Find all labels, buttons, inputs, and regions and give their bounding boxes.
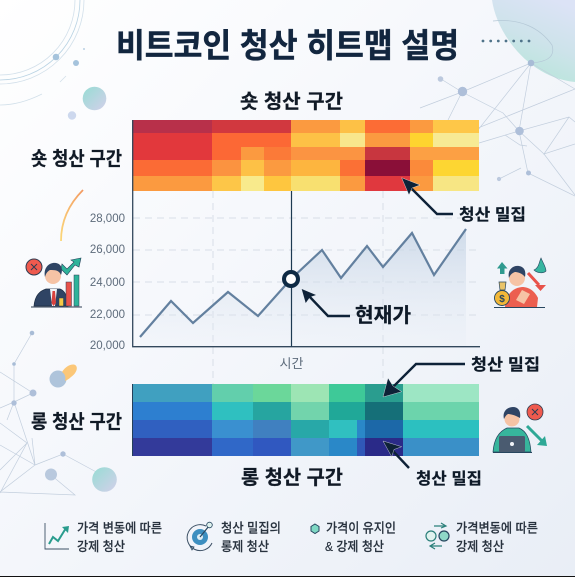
callout: long cluster lower bbox=[383, 441, 482, 488]
decoration: bubbles top left bbox=[68, 87, 106, 120]
legend item 3 bbox=[311, 520, 396, 554]
long liquidation heatmap bbox=[132, 384, 479, 456]
label: short zone left: 숏 청산 구간 bbox=[31, 148, 122, 170]
price area fill bbox=[140, 229, 466, 346]
icon: businessman with chart bbox=[26, 258, 82, 307]
legend item 4: 가격변동에 따른 bbox=[456, 520, 538, 536]
price line bbox=[140, 229, 466, 337]
legend item 4: 강제 청산 bbox=[456, 539, 504, 554]
legend item 1: 강제 청산 bbox=[77, 539, 125, 554]
legend item 4 bbox=[426, 520, 538, 554]
y axis labels: 28,000 bbox=[90, 213, 125, 225]
x axis label: 시간 bbox=[280, 356, 303, 371]
legend item 2: 청산 밀집의 bbox=[221, 520, 281, 536]
y axis labels: 22,000 bbox=[90, 309, 125, 321]
legend item 1 bbox=[45, 520, 162, 554]
legend item 2: 롱제 청산 bbox=[221, 539, 269, 554]
icon: trader with bitcoin bag bbox=[494, 258, 546, 308]
decoration: orange arc bbox=[61, 190, 83, 241]
callout: top cluster bbox=[402, 178, 526, 224]
callout: current price: 현재가 bbox=[355, 304, 411, 327]
icon: trader with bitcoin bag: $ bbox=[499, 294, 505, 305]
decoration: bubble bottom left bbox=[92, 467, 117, 492]
callout: long cluster upper: 청산 밀집 bbox=[471, 356, 540, 374]
legend item 1: 가격 변동에 따른 bbox=[77, 520, 162, 536]
decoration: network right bbox=[420, 60, 575, 196]
heading: short zone top: 숏 청산 구간 bbox=[240, 91, 343, 113]
current price marker bbox=[284, 272, 298, 286]
legend item 3: 가격이 유지인 bbox=[326, 520, 396, 536]
title: 비트코인 청산 히트맵 설명 bbox=[116, 27, 459, 64]
decoration: network bottom left bbox=[0, 331, 100, 495]
callout: long cluster upper bbox=[383, 356, 540, 397]
decoration: top left rings bbox=[0, 0, 85, 105]
legend item 2 bbox=[187, 520, 281, 554]
legend item 3: & 강제 청산 bbox=[325, 539, 384, 554]
heading: long zone bottom: 롱 청산 구간 bbox=[241, 467, 343, 489]
callout: long cluster lower: 청산 밀집 bbox=[416, 470, 482, 488]
y axis labels: 20,000 bbox=[90, 340, 125, 352]
y axis labels: 24,000 bbox=[90, 277, 125, 289]
callout: current price bbox=[302, 289, 411, 327]
short liquidation heatmap bbox=[132, 120, 479, 191]
current time line bbox=[290, 191, 292, 346]
price chart bbox=[133, 120, 480, 384]
decoration: capsule bbox=[50, 364, 77, 388]
legend bbox=[45, 520, 538, 554]
y axis labels bbox=[90, 213, 125, 352]
y axis labels: 26,000 bbox=[90, 244, 125, 256]
callout: top cluster: 청산 밀집 bbox=[459, 206, 526, 224]
decoration: top right blob bbox=[492, 0, 575, 82]
dotted accent bbox=[482, 40, 530, 42]
label: long zone left: 롱 청산 구간 bbox=[31, 411, 122, 433]
icon: person at laptop bbox=[493, 404, 547, 452]
axes bbox=[133, 120, 480, 347]
